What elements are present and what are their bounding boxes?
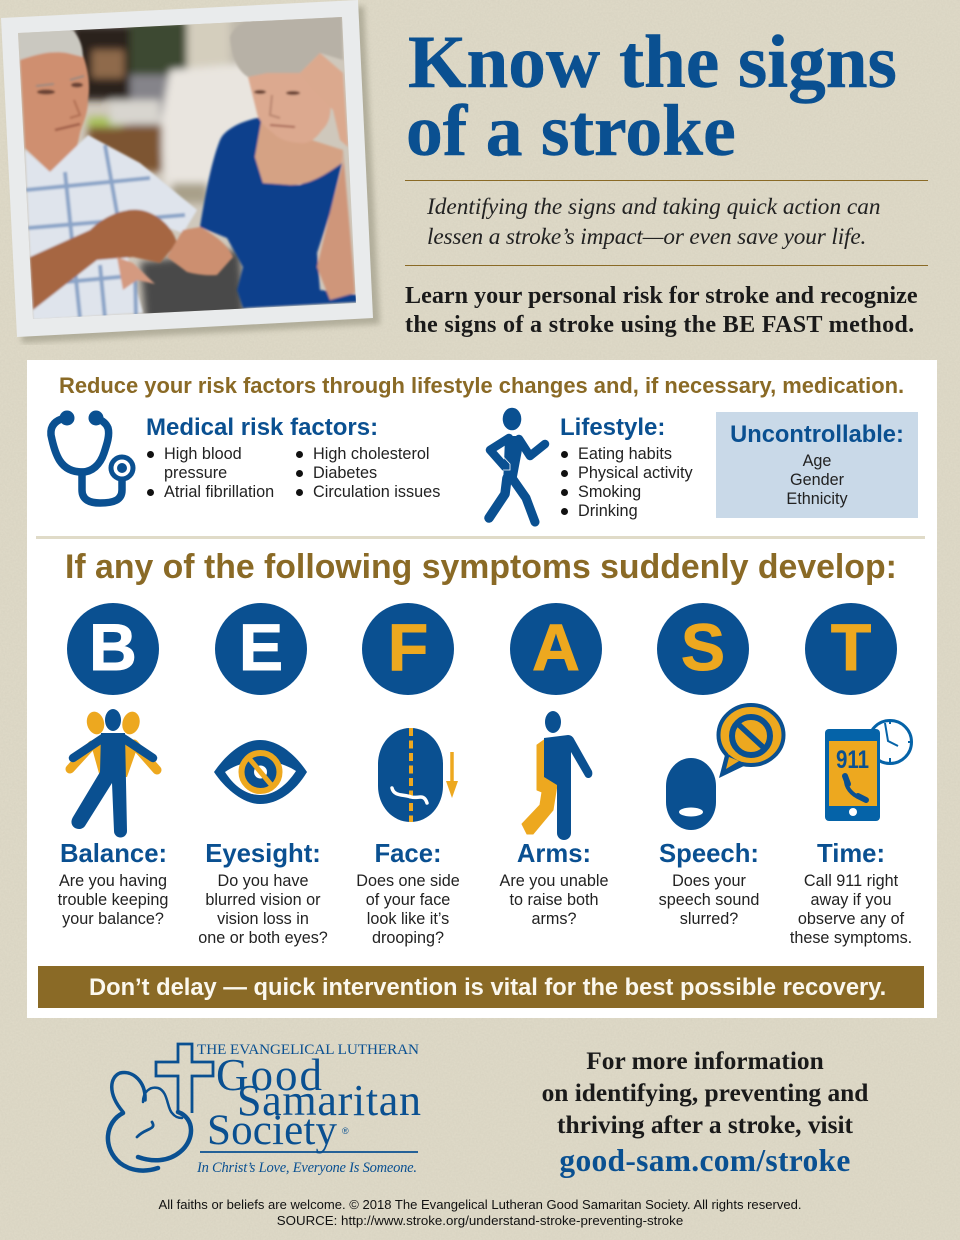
letter circle A: A (532, 610, 580, 684)
intro italic text: Identifying the signs and taking quick action can (427, 194, 881, 220)
list: medical left column (147, 445, 274, 501)
letter circle E: E (239, 610, 283, 684)
heading: eyesight: Eyesight: (205, 840, 321, 868)
icon: stethoscope (47, 410, 136, 507)
text: time: these symptoms. (790, 929, 912, 947)
list: lifestyle: Smoking (578, 483, 641, 501)
more information text: For more information (586, 1047, 824, 1075)
text: speech: speech sound (659, 891, 759, 909)
text: time: away if you (811, 891, 891, 909)
text: arms (500, 872, 608, 928)
text: balance (58, 872, 168, 928)
icon: balance figure (66, 709, 162, 838)
heading: symptoms: If any of the following symptoms suddenly develop: (65, 548, 897, 586)
heading: reduce risk factors: Reduce your risk factors through lifestyle changes and, if necessary, medication. (59, 373, 904, 398)
text: eyesight: blurred vision or (205, 891, 321, 909)
text: arms: to raise both (509, 891, 599, 909)
title: Know the signs (408, 21, 897, 104)
footer small print: All faiths or beliefs are welcome. © 2018 The Evangelical Lutheran Good Samaritan Society. All rights reserved. (159, 1197, 801, 1212)
list: medical right column (296, 445, 440, 501)
letter circle B (67, 603, 159, 695)
intro italic text (426, 194, 881, 250)
heading: speech: Speech: (659, 840, 759, 868)
list: medical right column: Circulation issues (313, 483, 440, 501)
text: face (356, 872, 460, 947)
logo: Good Samaritan Society (106, 1041, 421, 1176)
text: eyesight: vision loss in (217, 910, 309, 928)
banner: don't delay: Don’t delay — quick intervention is vital for the best possible recovery. (89, 975, 886, 1001)
icon: drooping face (378, 728, 458, 822)
panel: uncontrollable (716, 412, 918, 518)
heading: lifestyle: Lifestyle: (560, 414, 665, 441)
panel: main white panel (27, 360, 937, 1018)
more information text: on identifying, preventing and (542, 1079, 868, 1107)
logo: Good Samaritan Society: Good (216, 1050, 322, 1100)
woman (167, 227, 233, 275)
text: speech (659, 872, 759, 928)
icon: speech head and bubble (666, 703, 786, 830)
letter circle F: F (388, 610, 428, 684)
intro italic text: lessen a stroke’s impact—or even save your life. (427, 224, 866, 250)
text: time (790, 872, 912, 947)
text: time: Call 911 right (804, 872, 898, 890)
text: speech: Does your (672, 872, 746, 890)
list: medical left column: Atrial fibrillation (164, 483, 274, 501)
call to learn text (405, 282, 918, 338)
text: arms: Are you unable (500, 872, 608, 890)
text: speech: slurred? (680, 910, 738, 928)
banner: don't delay (38, 966, 924, 1008)
letter circle T (805, 603, 897, 695)
logo: Good Samaritan Society: Samaritan (237, 1076, 421, 1125)
list: lifestyle (561, 445, 693, 520)
letter circle B: B (89, 610, 137, 684)
more information text (542, 1047, 868, 1139)
photo: older couple in a white print frame (1, 0, 382, 345)
logo: Good Samaritan Society: In Christ’s Love, Everyone Is Someone. (196, 1160, 417, 1176)
icon: arm weakness figure (522, 711, 592, 840)
call to learn text: Learn your personal risk for stroke and recognize (405, 282, 918, 309)
title line two: of a stroke (406, 89, 736, 171)
list: medical left column: pressure (164, 464, 227, 482)
letter circle T: T (831, 610, 871, 684)
text: arms: arms? (532, 910, 576, 928)
more information text: thriving after a stroke, visit (557, 1111, 853, 1139)
icon: phone with 911 and clock (825, 719, 913, 821)
panel: uncontrollable: Age (803, 452, 831, 470)
heading: balance: Balance: (60, 840, 167, 868)
panel: uncontrollable: Gender (790, 471, 844, 489)
letter circle F (362, 603, 454, 695)
text: balance: Are you having (59, 872, 167, 890)
list: lifestyle: Drinking (578, 502, 638, 520)
list: lifestyle: Physical activity (578, 464, 693, 482)
letter circle S: S (681, 610, 725, 684)
icon: phone with 911 and clock: 911 (836, 746, 869, 774)
text: eyesight (198, 872, 328, 947)
letter circle E (215, 603, 307, 695)
panel: uncontrollable: Uncontrollable: (730, 422, 904, 448)
icon: eye with prohibition (214, 740, 307, 804)
text: balance: trouble keeping (58, 891, 168, 909)
list: medical left column: High blood (164, 445, 242, 463)
logo: Good Samaritan Society: Society (207, 1107, 338, 1154)
heading: time: Time: (817, 840, 885, 868)
text: face: drooping? (372, 929, 444, 947)
footer small print (158, 1197, 801, 1228)
list: medical right column: Diabetes (313, 464, 377, 482)
heading: face: Face: (374, 840, 442, 868)
logo: Good Samaritan Society: THE EVANGELICAL LUTHERAN (197, 1041, 419, 1058)
man (20, 52, 89, 172)
text: face: Does one side (356, 872, 460, 890)
panel: uncontrollable: Ethnicity (786, 490, 848, 508)
logo: Good Samaritan Society: ® (342, 1126, 349, 1136)
footer small print: SOURCE: http://www.stroke.org/understand-stroke-preventing-stroke (277, 1213, 683, 1228)
text: face: look like it’s (367, 910, 449, 928)
text: face: of your face (366, 891, 450, 909)
list: medical right column: High cholesterol (313, 445, 430, 463)
text: eyesight: one or both eyes? (198, 929, 328, 947)
heading: arms: Arms: (517, 840, 591, 868)
text: time: observe any of (798, 910, 904, 928)
letter circle S (657, 603, 749, 695)
list: lifestyle: Eating habits (578, 445, 672, 463)
text: eyesight: Do you have (218, 872, 308, 890)
link: website: good-sam.com/stroke (559, 1143, 851, 1178)
icon: walking person (484, 408, 550, 526)
letter circle A (510, 603, 602, 695)
text: balance: your balance? (62, 910, 164, 928)
call to learn text: the signs of a stroke using the BE FAST method. (405, 311, 914, 338)
heading: medical risk factors: Medical risk factors: (146, 414, 378, 441)
